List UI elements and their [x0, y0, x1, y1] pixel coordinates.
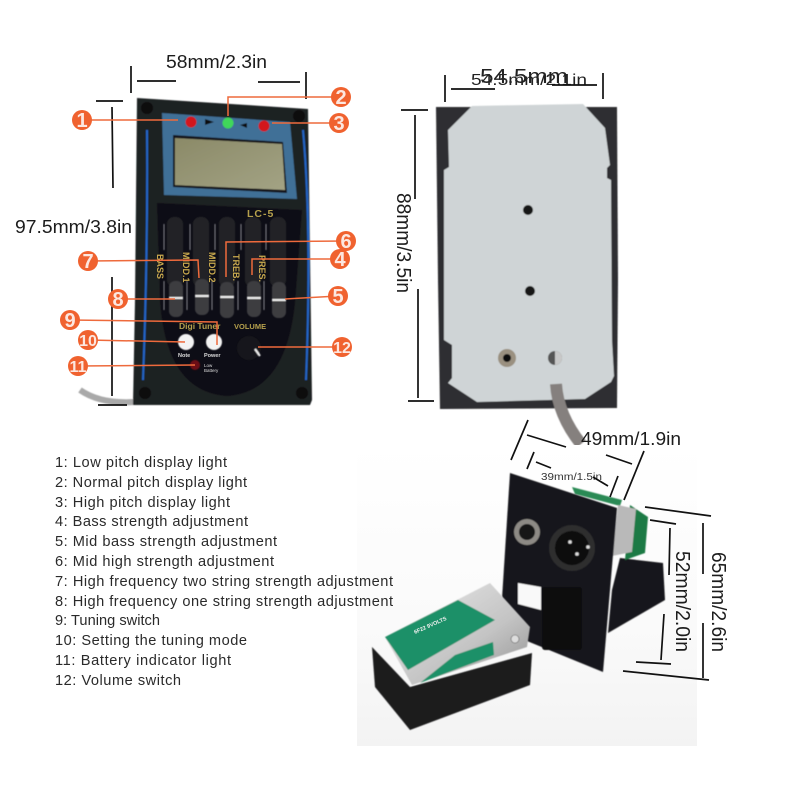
dimension: height 97.5mm: 97.5mm/3.8in [15, 217, 132, 237]
callout numbers: 5 [332, 286, 344, 308]
sliders [164, 224, 286, 318]
panel: rear view [392, 66, 618, 444]
panel: jack plate and battery photo [357, 420, 729, 746]
panel: front view of LC-5 preamp [15, 52, 356, 405]
callout numbers: 11 [70, 359, 87, 376]
panel: feature list: 7: High frequency two string strength adjustment [55, 574, 393, 590]
callout numbers: 6 [340, 231, 352, 253]
callout lines [70, 97, 346, 366]
panel: feature list: 12: Volume switch [55, 673, 181, 689]
dimension: height 97.5mm [15, 101, 132, 405]
panel: feature list: 2: Normal pitch display light [55, 475, 247, 491]
photo background [357, 445, 697, 746]
panel: feature list [55, 455, 393, 689]
dimension: height 88mm [392, 110, 434, 401]
control captions: Note [178, 353, 190, 359]
dimension: width 58mm [131, 52, 306, 99]
dimension: 52mm [636, 520, 693, 664]
dimension: 52mm: 52mm/2.0in [671, 551, 693, 652]
panel: feature list: 8: High frequency one string strength adjustment [55, 594, 393, 610]
panel: feature list: 3: High pitch display light [55, 495, 230, 511]
slider labels [155, 252, 267, 283]
dimension: 49mm: 49mm/1.9in [581, 429, 681, 449]
control captions: Battery [204, 368, 219, 373]
battery label: 6F22 9VOLTS [413, 616, 448, 636]
callout numbers: 4 [334, 249, 346, 271]
callout numbers: 3 [333, 113, 345, 135]
dimension: 39mm [527, 452, 618, 497]
dimension: 65mm [623, 507, 729, 680]
model label: LC-5 [247, 208, 274, 220]
slider labels: TREB. [231, 254, 241, 281]
panel: feature list: 6: Mid high strength adjustment [55, 554, 274, 570]
callout numbers: 8 [112, 289, 124, 311]
panel: feature list: 4: Bass strength adjustment [55, 514, 248, 530]
callout numbers: 1 [76, 110, 88, 132]
slider labels: BASS [155, 254, 165, 279]
slider labels: MIDD.2 [207, 252, 217, 283]
dimension: height 88mm: 88mm/3.5in [392, 193, 414, 293]
dimension: width 54.5mm: 54.5mm/2.1in [471, 72, 587, 89]
dimension: 65mm: 65mm/2.6in [707, 552, 729, 652]
9V battery in holder [372, 583, 532, 730]
callout numbers: 7 [82, 251, 94, 273]
battery holder rear and PCB [572, 487, 665, 633]
control captions [178, 321, 266, 373]
dimension: width 54.5mm [445, 66, 603, 102]
photo: rear plate [436, 104, 618, 444]
dimension: 49mm [511, 420, 681, 500]
dimension: width 54.5mm: 54.5mm [480, 66, 568, 88]
dimension: 39mm: 39mm/1.5in [541, 471, 602, 483]
control captions: Power [204, 353, 221, 359]
control captions: Digi Tuner [179, 321, 221, 331]
control captions: VOLUME [234, 322, 266, 331]
panel: feature list: 10: Setting the tuning mode [55, 633, 247, 649]
callout numbers: 2 [335, 87, 347, 109]
tuner buttons and volume knob [178, 334, 261, 370]
callout numbers: 9 [64, 310, 76, 332]
callout numbers [60, 87, 356, 376]
panel: feature list: 5: Mid bass strength adjustment [55, 534, 277, 550]
dimension: width 58mm: 58mm/2.3in [166, 52, 267, 72]
panel: feature list: 9: Tuning switch [55, 613, 160, 629]
callout numbers: 12 [333, 340, 351, 357]
slider labels: MIDD.1 [181, 252, 191, 283]
control captions: Low [204, 363, 213, 368]
slider labels: PRES. [257, 255, 267, 282]
callout numbers: 10 [79, 333, 97, 350]
photo: preamp faceplate [80, 98, 312, 405]
panel: feature list: 1: Low pitch display light [55, 455, 227, 471]
panel: feature list: 11: Battery indicator light [55, 653, 231, 669]
jack plate [500, 473, 617, 672]
